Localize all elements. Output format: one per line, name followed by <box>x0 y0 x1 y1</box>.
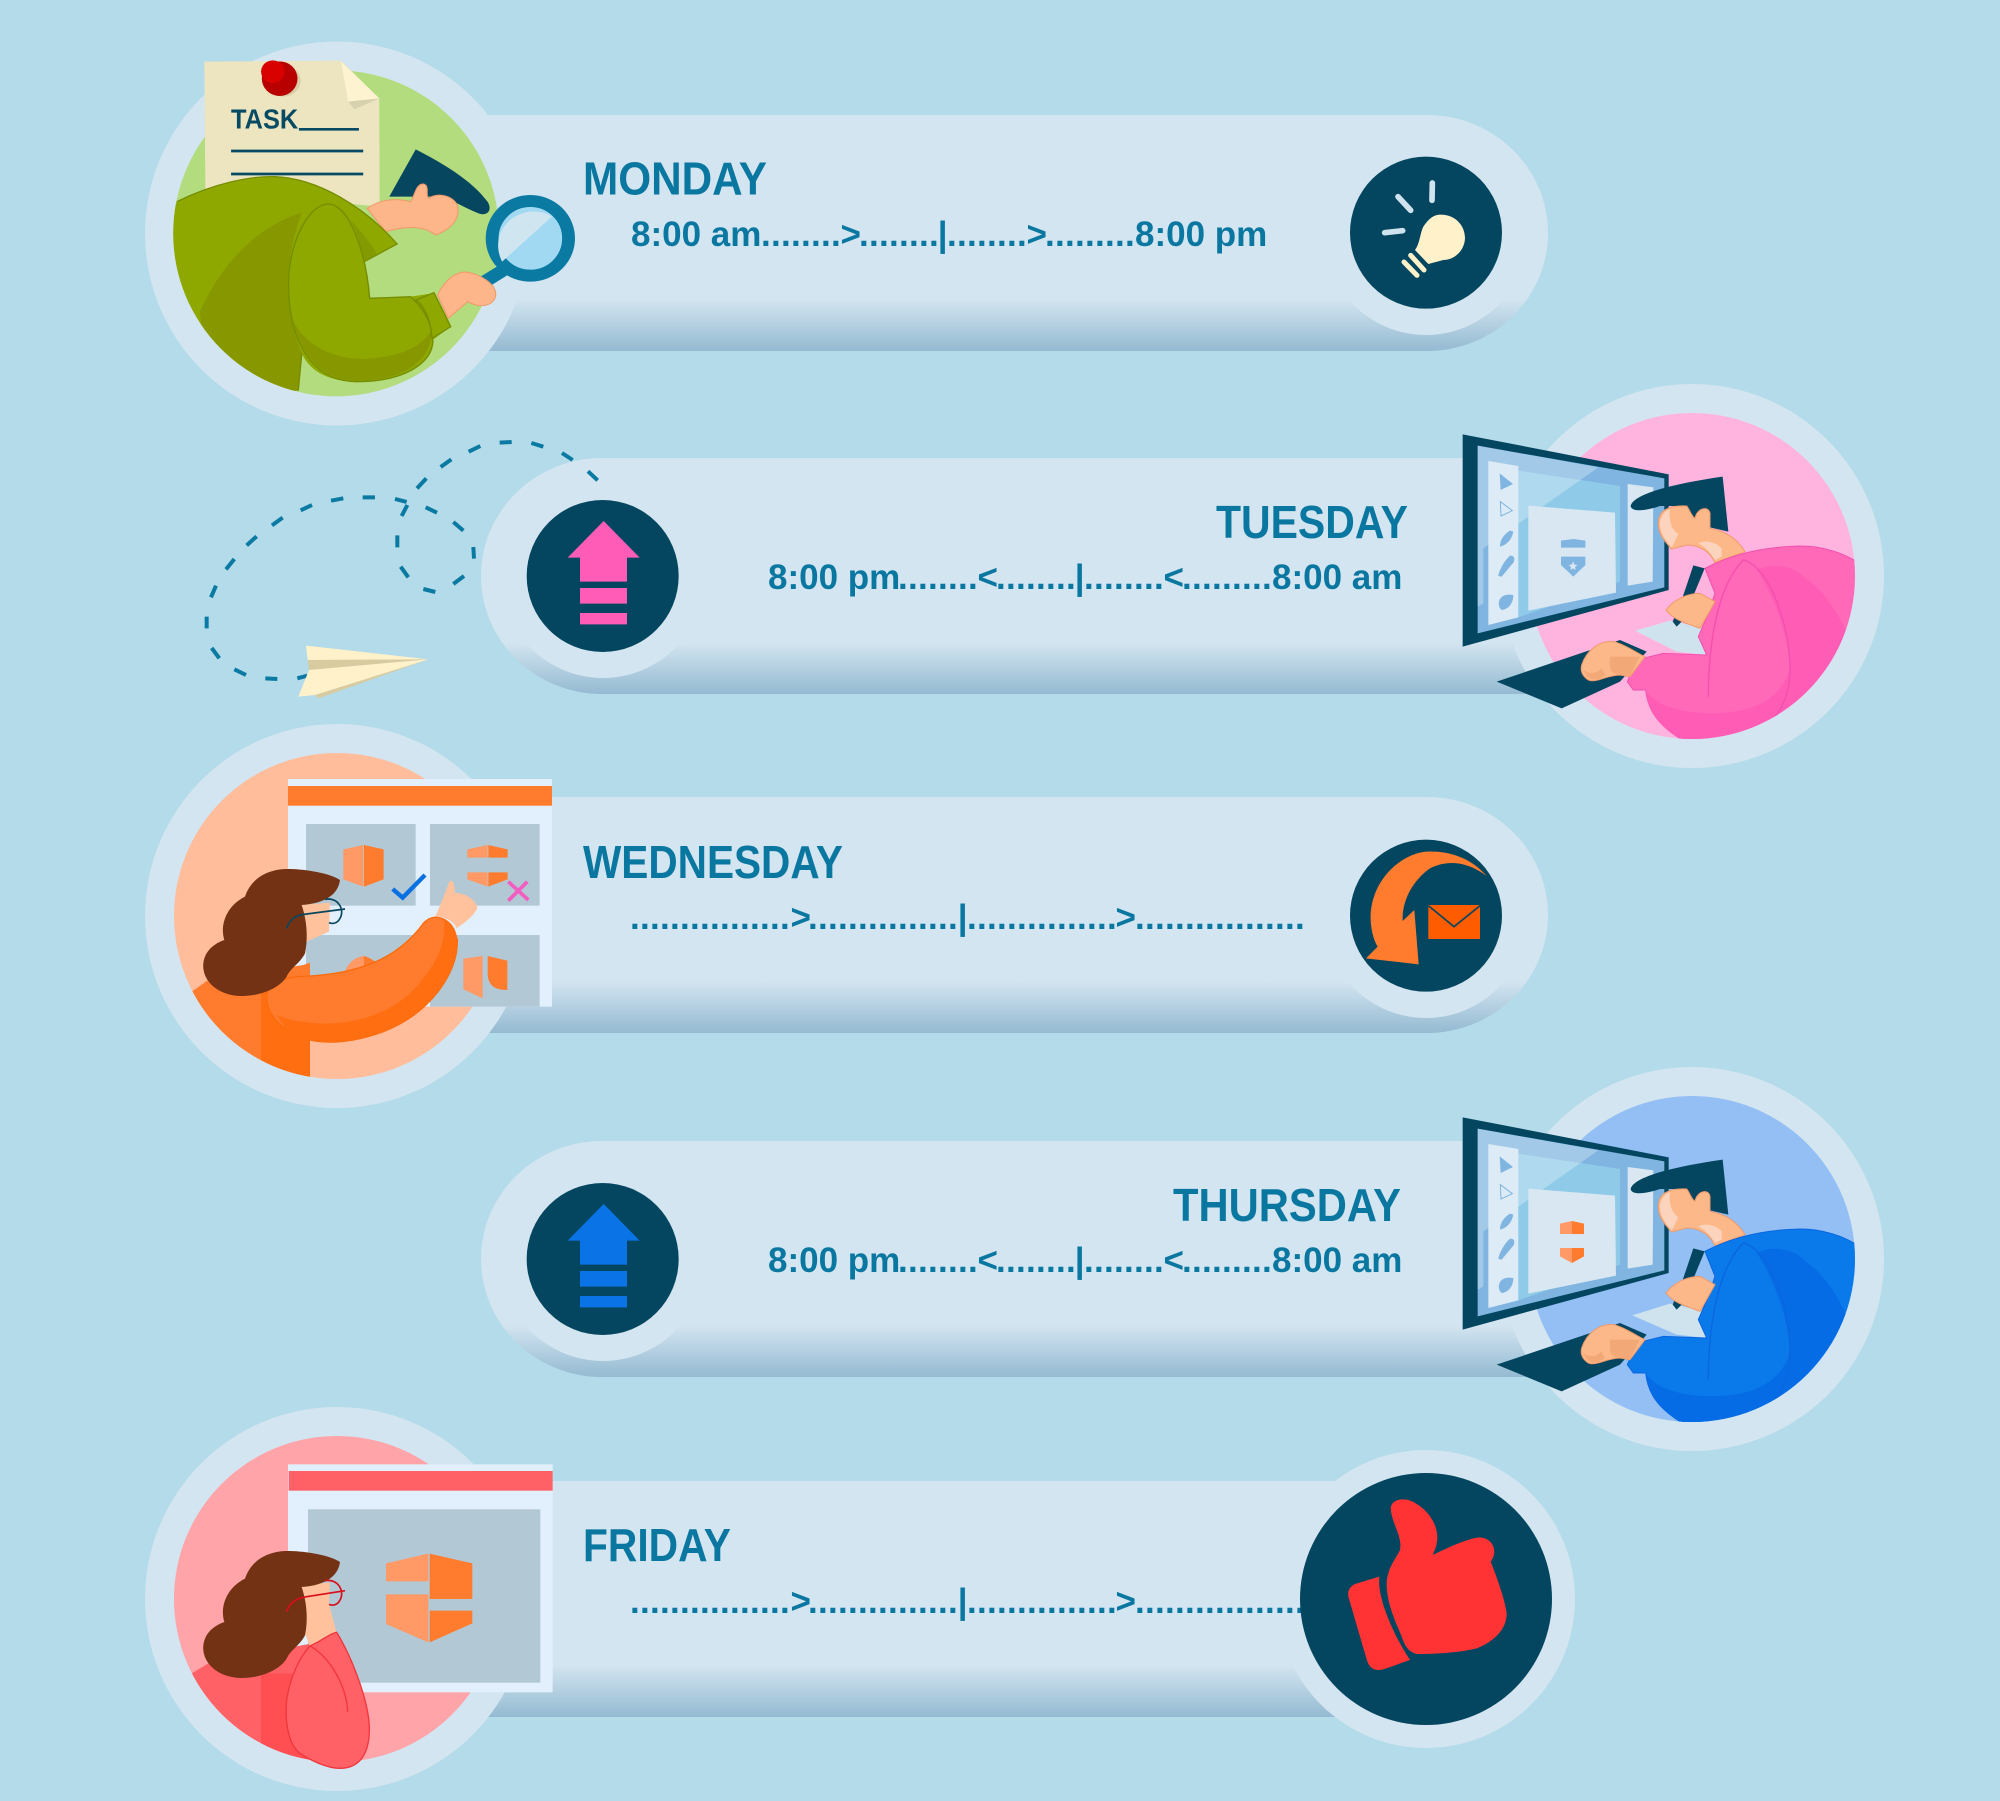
pointing hand <box>435 881 477 928</box>
icon: blue up arrow <box>527 1183 679 1335</box>
panel: Tuesday <box>481 384 1884 768</box>
keyboard <box>1497 1323 1647 1391</box>
dashed flight path <box>207 442 598 698</box>
body <box>192 1644 310 1760</box>
Monday time range: > <box>1026 215 1047 254</box>
typing hand <box>1581 1324 1645 1364</box>
Friday dotted line: ................. <box>1135 1582 1305 1621</box>
Thursday time range: ........ <box>996 1241 1076 1280</box>
Thursday time range: < <box>1164 1241 1184 1280</box>
panel: Monday <box>145 42 1548 426</box>
arm <box>286 1632 369 1768</box>
Monday time range: ........ <box>947 215 1027 254</box>
Thursday icon ring <box>501 1157 705 1361</box>
Wednesday dotted line: ............... <box>808 898 958 937</box>
Tuesday time range: | <box>1075 558 1084 597</box>
Wednesday dotted line: > <box>1116 898 1136 937</box>
panel: Thursday <box>481 1067 1884 1451</box>
Wednesday dotted line: ................ <box>630 898 790 937</box>
Thursday time range: | <box>1075 1241 1084 1280</box>
Thursday time range: 8:00 am <box>1272 1241 1402 1280</box>
illustration: man at computer (pink) <box>1463 413 1860 747</box>
Monday time range: 8:00 pm <box>1135 215 1267 254</box>
task note <box>204 60 380 207</box>
body <box>1627 546 1860 747</box>
Monday time range: | <box>938 215 947 254</box>
Thursday time range: ......... <box>1182 1241 1272 1280</box>
Tuesday time range: ........ <box>996 558 1076 597</box>
Wednesday dotted line: ............... <box>967 898 1117 937</box>
Friday dotted line: | <box>958 1582 968 1621</box>
Tuesday time range: < <box>978 558 998 597</box>
Wednesday dotted line: ................. <box>1135 898 1305 937</box>
Tuesday time range: < <box>1164 558 1184 597</box>
icon: pink up arrow <box>527 500 679 652</box>
icon: paper plane <box>298 646 428 698</box>
heading: Thursday: THURSDAY <box>1173 1179 1401 1231</box>
Wednesday dotted line: | <box>958 898 968 937</box>
Tuesday bar <box>481 458 1692 694</box>
shield board <box>288 1464 553 1692</box>
head <box>203 1551 345 1678</box>
body <box>154 177 451 393</box>
arm <box>267 917 457 1042</box>
Thursday time range: ........ <box>1084 1241 1164 1280</box>
illustration: woman at approved shield <box>163 1436 553 1768</box>
Monday time range: ......... <box>1045 215 1135 254</box>
Thursday illustration ring <box>1500 1067 1884 1451</box>
Wednesday bar <box>337 797 1548 1033</box>
Friday dotted line: > <box>790 1582 811 1621</box>
Tuesday icon ring <box>501 474 705 678</box>
upper hand <box>367 184 458 235</box>
monitor <box>1463 434 1669 647</box>
illustration: man at computer (blue) <box>1463 1096 1860 1430</box>
Tuesday time range: 8:00 pm <box>768 558 900 597</box>
neck and face <box>302 1583 337 1647</box>
Monday illustration ring <box>145 42 529 426</box>
keyboard <box>1497 640 1647 708</box>
options board <box>288 779 552 1007</box>
Monday bar <box>337 115 1548 351</box>
heading: Friday: FRIDAY <box>583 1519 731 1571</box>
head and neck <box>1658 506 1745 563</box>
Tuesday time range: ........ <box>1084 558 1164 597</box>
Thursday time range: < <box>978 1241 998 1280</box>
Friday dotted line: ............... <box>808 1582 958 1621</box>
Monday time range: ........ <box>761 215 841 254</box>
hair <box>1631 477 1728 532</box>
icon: thumbs up <box>1300 1473 1552 1725</box>
illustration: woman choosing options <box>163 753 552 1083</box>
icon: envelope with arrow <box>1350 840 1502 992</box>
Tuesday time range: 8:00 am <box>1272 558 1402 597</box>
Friday dotted line: ................ <box>630 1582 790 1621</box>
panel: Friday <box>145 1407 1575 1791</box>
illustration: man reading a task note <box>154 60 569 396</box>
drawing tablet <box>1632 1304 1707 1338</box>
head and neck <box>1658 1189 1745 1246</box>
Friday dotted line: > <box>1116 1582 1136 1621</box>
Tuesday time range: ......... <box>1182 558 1272 597</box>
Friday illustration ring <box>145 1407 529 1791</box>
Wednesday dotted line: > <box>790 898 811 937</box>
body <box>1627 1229 1860 1430</box>
Thursday time range: 8:00 pm <box>768 1241 900 1280</box>
Monday time range: 8:00 am <box>631 215 761 254</box>
hair <box>1631 1160 1728 1215</box>
lower hand and magnifier <box>437 201 569 318</box>
Wednesday illustration ring <box>145 724 529 1108</box>
task note: TASK <box>231 104 298 135</box>
Wednesday icon ring <box>1324 814 1528 1018</box>
Thursday bar <box>481 1141 1692 1377</box>
Friday dotted line: ............... <box>967 1582 1117 1621</box>
pen and hand <box>1666 565 1715 628</box>
typing hand <box>1581 641 1645 681</box>
heading: Monday: MONDAY <box>583 152 767 204</box>
panel: Wednesday <box>145 724 1548 1108</box>
Tuesday time range: ........ <box>898 558 978 597</box>
pen and hand <box>1666 1248 1715 1311</box>
Tuesday illustration ring <box>1500 384 1884 768</box>
Friday bar <box>337 1481 1548 1717</box>
heading: Wednesday: WEDNESDAY <box>583 836 843 888</box>
monitor <box>1463 1117 1669 1330</box>
Monday icon ring <box>1324 131 1528 335</box>
Monday time range: ........ <box>859 215 939 254</box>
held tablet <box>389 149 490 214</box>
Monday time range: > <box>840 215 861 254</box>
Thursday time range: ........ <box>898 1241 978 1280</box>
body <box>192 962 310 1077</box>
head <box>203 869 345 996</box>
icon: light bulb <box>1350 157 1502 309</box>
heading: Tuesday: TUESDAY <box>1216 496 1408 548</box>
Friday icon ring <box>1277 1450 1575 1748</box>
drawing tablet <box>1635 621 1707 655</box>
